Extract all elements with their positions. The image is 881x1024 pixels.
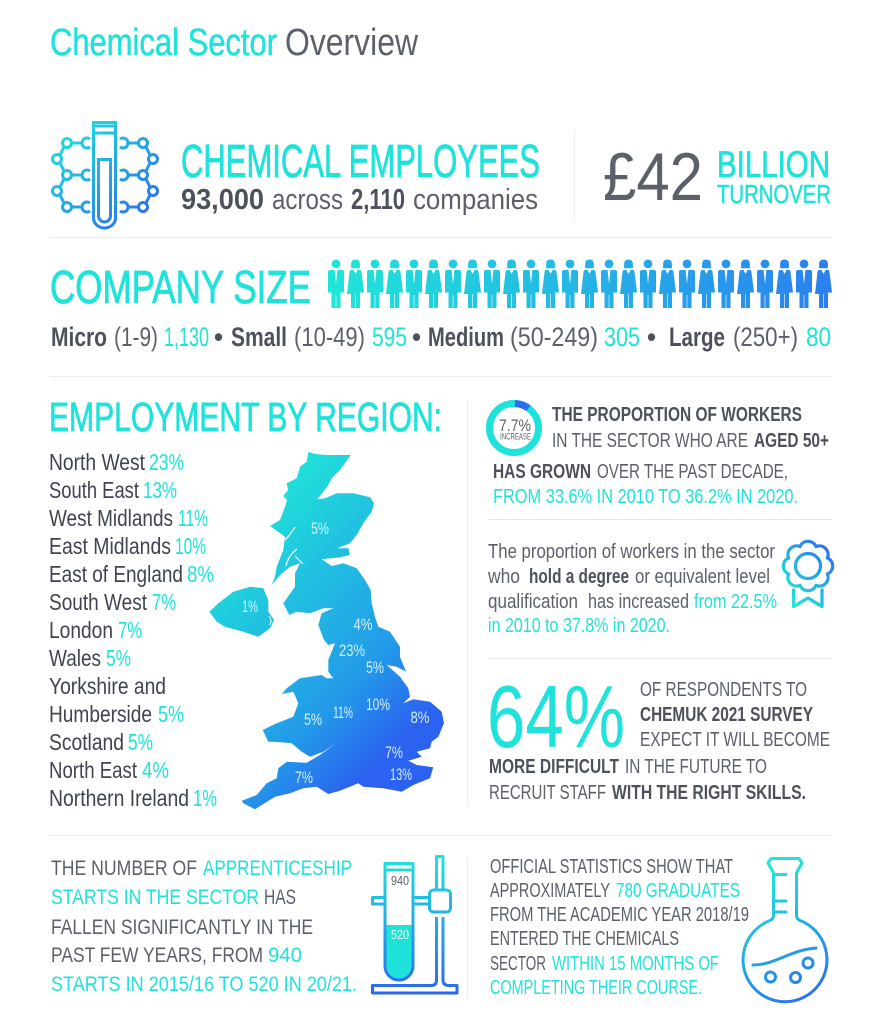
text: degree qualification: who — [487, 566, 520, 588]
text: degree qualification: qualification — [488, 591, 578, 613]
map: UK regions — [209, 452, 444, 809]
map percentage labels: 1% — [242, 597, 258, 616]
map shape: Great Britain — [242, 452, 444, 809]
text: graduates: OFFICIAL STATISTICS SHOW THAT — [490, 856, 733, 878]
headline: chemical employees: companies — [413, 184, 538, 216]
text: apprenticeship starts: FALLEN SIGNIFICANTLY IN THE — [51, 916, 313, 939]
map percentage labels: 5% — [311, 519, 329, 538]
stat: 64%: 64% — [487, 667, 625, 766]
map percentage labels: 4% — [354, 615, 372, 634]
list: employment by region: Scotland — [49, 729, 124, 755]
text: workers aged 50+ — [493, 404, 829, 508]
map percentage labels: 13% — [390, 765, 412, 784]
list: employment by region: Humberside — [49, 701, 152, 727]
text: graduates: SECTOR — [490, 953, 546, 975]
map percentage labels: 23% — [339, 641, 365, 660]
map percentage labels: 7% — [385, 743, 403, 762]
icon: award rosette — [783, 541, 833, 606]
headline: turnover: TURNOVER — [717, 179, 831, 209]
headline: chemical employees: CHEMICAL EMPLOYEES — [181, 135, 540, 187]
company size breakdown: Micro — [51, 322, 107, 352]
text: apprenticeship starts: STARTS IN 2015/16 TO 520 IN 20/21. — [51, 973, 357, 996]
text: recruitment survey: IN THE FUTURE TO — [625, 756, 767, 778]
list: employment by region: East Midlands — [49, 533, 171, 559]
map percentage labels: 11% — [333, 703, 353, 722]
text: apprenticeship starts: STARTS IN THE SECTOR — [51, 886, 259, 909]
company size breakdown: 1,130 — [164, 322, 209, 352]
text: graduates — [490, 856, 749, 999]
list: employment by region: 4% — [142, 757, 169, 783]
company size breakdown: (10-49) — [294, 322, 365, 352]
text: apprenticeship starts: APPRENTICESHIP — [203, 857, 352, 880]
list: employment by region: 5% — [158, 701, 184, 727]
text: recruitment survey: OF RESPONDENTS TO — [640, 679, 807, 701]
list: employment by region: 8% — [187, 561, 214, 587]
icon: test tube on stand — [372, 856, 457, 993]
text: degree qualification: has increased — [588, 591, 689, 613]
map percentage labels — [242, 519, 430, 787]
map shape: Northern Ireland — [209, 587, 274, 637]
text: apprenticeship starts: 940 — [268, 944, 302, 967]
text: graduates: FROM THE ACADEMIC YEAR 2018/19 — [490, 904, 749, 926]
company size breakdown: 305 — [604, 322, 640, 352]
text: recruitment survey — [489, 679, 830, 804]
text: apprenticeship starts: THE NUMBER OF — [51, 857, 197, 880]
text: apprenticeship starts: PAST FEW YEARS, FROM — [51, 944, 263, 967]
map percentage labels: 7% — [295, 768, 313, 787]
company size breakdown: Small — [231, 322, 287, 352]
company size breakdown: 80 — [806, 322, 831, 352]
headline: turnover — [603, 139, 831, 215]
icon: 7.7% ring: INCREASE — [500, 432, 531, 442]
text: workers aged 50+: IN THE SECTOR WHO ARE — [552, 430, 748, 452]
text: graduates: APPROXIMATELY — [490, 880, 610, 902]
pictogram: row of workers — [328, 260, 832, 308]
list: employment by region: North East — [49, 757, 137, 783]
headline: turnover: BILLION — [717, 144, 830, 185]
text: degree qualification: from 22.5% — [694, 591, 777, 613]
company size breakdown: (50-249) — [510, 322, 598, 352]
company size breakdown: • — [214, 322, 223, 352]
text: degree qualification: in 2010 to 37.8% in 2020. — [488, 615, 670, 637]
list: employment by region: East of England — [49, 561, 183, 587]
list: employment by region: 7% — [152, 589, 176, 615]
list: employment by region: 5% — [106, 645, 131, 671]
heading: company size: COMPANY SIZE — [50, 261, 311, 313]
company size breakdown — [51, 322, 831, 352]
list: employment by region: London — [49, 617, 113, 643]
headline: turnover: £42 — [603, 139, 703, 215]
icon: test tube on stand: 940 — [391, 873, 409, 888]
headline: chemical employees: 2,110 — [351, 184, 405, 216]
text: workers aged 50+: THE PROPORTION OF WORKERS — [552, 404, 802, 426]
list: employment by region: West Midlands — [49, 505, 173, 531]
text: workers aged 50+: HAS GROWN — [493, 461, 591, 483]
icon: 7.7% ring: 7.7% — [499, 416, 531, 435]
text: workers aged 50+: FROM 33.6% IN 2010 TO 36.2% IN 2020. — [493, 486, 798, 508]
title: Chemical Sector — [50, 22, 277, 64]
text: graduates: 780 GRADUATES — [616, 880, 740, 902]
heading: employment by region: EMPLOYMENT BY REGION: — [49, 394, 442, 440]
list: employment by region: 10% — [175, 533, 206, 559]
text: graduates: ENTERED THE CHEMICALS — [490, 928, 679, 950]
text: recruitment survey: RECRUIT STAFF — [489, 782, 606, 804]
text: degree qualification: hold a degree — [529, 566, 629, 588]
text: recruitment survey: CHEMUK 2021 SURVEY — [640, 704, 814, 726]
map percentage labels: 5% — [366, 658, 384, 677]
company size breakdown: • — [412, 322, 421, 352]
list: employment by region: Yorkshire and — [49, 673, 166, 699]
headline: chemical employees — [181, 135, 540, 216]
list: employment by region: 13% — [143, 477, 177, 503]
text: apprenticeship starts — [51, 857, 357, 996]
list: employment by region: 23% — [149, 449, 184, 475]
icon: test tube with molecules — [52, 122, 158, 228]
list: employment by region: North West — [49, 449, 146, 475]
list: employment by region: South East — [49, 477, 139, 503]
text: degree qualification: The proportion of workers in the sector — [488, 541, 775, 563]
list: employment by region: 7% — [118, 617, 142, 643]
text: workers aged 50+: AGED 50+ — [754, 430, 829, 452]
list: employment by region: 1% — [193, 785, 217, 811]
text: graduates: COMPLETING THEIR COURSE. — [490, 977, 702, 999]
icon: round-bottom flask — [743, 858, 827, 1002]
list: employment by region — [49, 449, 217, 811]
company size breakdown: Medium — [428, 322, 504, 352]
text: graduates: WITHIN 15 MONTHS OF — [552, 953, 719, 975]
list: employment by region: 11% — [178, 505, 208, 531]
company size breakdown: Large — [669, 322, 725, 352]
map percentage labels: 8% — [410, 708, 430, 727]
icon: test tube on stand: 520 — [391, 927, 409, 942]
list: employment by region: South West — [49, 589, 147, 615]
text: recruitment survey: EXPECT IT WILL BECOME — [640, 729, 830, 751]
company size breakdown: 595 — [372, 322, 407, 352]
company size breakdown: (1-9) — [114, 322, 158, 352]
company size breakdown: (250+) — [733, 322, 798, 352]
headline: chemical employees: 93,000 — [181, 184, 264, 216]
icon: 7.7% ring — [490, 404, 538, 452]
title: Overview — [285, 22, 418, 64]
list: employment by region: 5% — [128, 729, 153, 755]
company size breakdown: • — [647, 322, 656, 352]
headline: chemical employees: across — [272, 184, 343, 216]
text: apprenticeship starts: HAS — [264, 886, 296, 909]
list: employment by region: Wales — [49, 645, 101, 671]
text: recruitment survey: WITH THE RIGHT SKILLS. — [612, 782, 806, 804]
text: workers aged 50+: OVER THE PAST DECADE, — [597, 461, 788, 483]
text: recruitment survey: MORE DIFFICULT — [489, 756, 619, 778]
text: degree qualification — [487, 541, 777, 637]
text: degree qualification: or equivalent level — [635, 566, 770, 588]
map percentage labels: 10% — [366, 695, 390, 714]
list: employment by region: Northern Ireland — [49, 785, 189, 811]
map percentage labels: 5% — [304, 710, 322, 729]
